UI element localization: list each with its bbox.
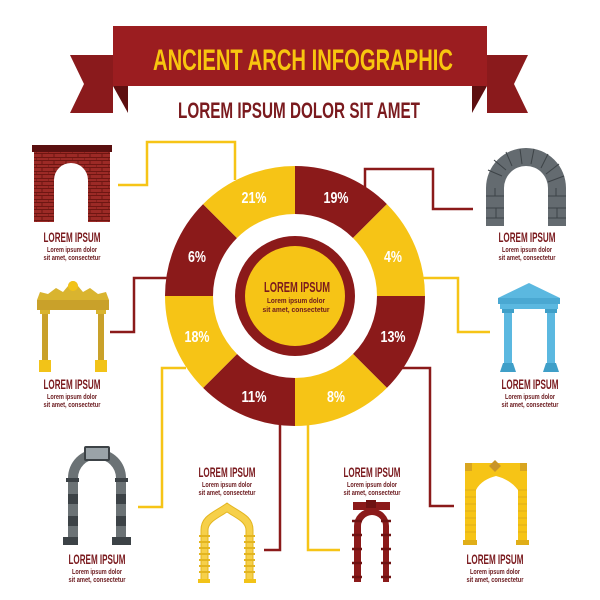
text: brick arch: Lorem ipsum dolor bbox=[47, 247, 97, 254]
donut chart bbox=[165, 166, 425, 426]
text: dark red arch bbox=[344, 464, 401, 497]
text: brick arch: LOREM IPSUM bbox=[44, 229, 100, 245]
donut chart: 18% bbox=[184, 329, 210, 346]
text: stone arch: sit amet, consectetur bbox=[498, 255, 556, 262]
text: yellow gate bbox=[466, 551, 524, 584]
text: onion arch: sit amet, consectetur bbox=[198, 490, 256, 497]
text: yellow gate: LOREM IPSUM bbox=[466, 551, 524, 567]
text: stone arch bbox=[498, 229, 556, 262]
text: ornate arch: sit amet, consectetur bbox=[44, 402, 101, 409]
text: temple bbox=[502, 376, 559, 409]
icon: ornate yellow arch bbox=[37, 281, 109, 372]
donut chart: 8% bbox=[327, 389, 345, 406]
text: grey arch: LOREM IPSUM bbox=[68, 551, 126, 567]
icon: yellow gate arch bbox=[463, 460, 529, 545]
text: onion arch bbox=[198, 464, 256, 497]
icon: yellow onion arch bbox=[198, 503, 256, 583]
center circle: Lorem ipsum dolor bbox=[267, 298, 325, 305]
donut chart: 6% bbox=[188, 249, 206, 266]
text: ornate arch: Lorem ipsum dolor bbox=[47, 394, 97, 401]
center circle: LOREM IPSUM bbox=[264, 279, 330, 296]
icon: grey arch bbox=[63, 447, 131, 545]
text: ornate arch: LOREM IPSUM bbox=[44, 376, 100, 392]
icon: brick arch bbox=[32, 145, 112, 222]
text: stone arch: Lorem ipsum dolor bbox=[502, 247, 552, 254]
title text: ANCIENT ARCH INFOGRAPHIC bbox=[153, 44, 453, 77]
text: grey arch: sit amet, consectetur bbox=[68, 577, 126, 584]
text: onion arch: Lorem ipsum dolor bbox=[202, 482, 252, 489]
center circle: sit amet, consectetur bbox=[262, 307, 330, 314]
center circle bbox=[235, 236, 355, 356]
donut chart: 13% bbox=[380, 329, 406, 346]
icon: stone arch bbox=[486, 148, 566, 226]
text: yellow gate: sit amet, consectetur bbox=[466, 577, 524, 584]
text: brick arch: sit amet, consectetur bbox=[44, 255, 101, 262]
donut chart: 19% bbox=[324, 190, 348, 207]
donut chart: 4% bbox=[384, 249, 402, 266]
text: onion arch: LOREM IPSUM bbox=[198, 464, 256, 480]
icon: blue temple bbox=[498, 283, 560, 372]
subtitle: LOREM IPSUM DOLOR SIT AMET bbox=[178, 98, 420, 123]
text: temple: sit amet, consectetur bbox=[502, 402, 559, 409]
text: ornate arch bbox=[44, 376, 101, 409]
icon: dark red arch bbox=[352, 500, 391, 582]
text: temple: Lorem ipsum dolor bbox=[505, 394, 555, 401]
text: grey arch: Lorem ipsum dolor bbox=[72, 569, 122, 576]
text: dark red arch: Lorem ipsum dolor bbox=[347, 482, 397, 489]
title banner bbox=[70, 26, 528, 113]
donut chart: 21% bbox=[242, 190, 266, 207]
text: stone arch: LOREM IPSUM bbox=[498, 229, 556, 245]
text: grey arch bbox=[68, 551, 126, 584]
connector lines bbox=[110, 142, 490, 550]
text: brick arch bbox=[44, 229, 101, 262]
text: yellow gate: Lorem ipsum dolor bbox=[470, 569, 520, 576]
donut chart: 11% bbox=[242, 389, 266, 406]
text: dark red arch: LOREM IPSUM bbox=[344, 464, 400, 480]
text: temple: LOREM IPSUM bbox=[502, 376, 558, 392]
text: dark red arch: sit amet, consectetur bbox=[344, 490, 401, 497]
